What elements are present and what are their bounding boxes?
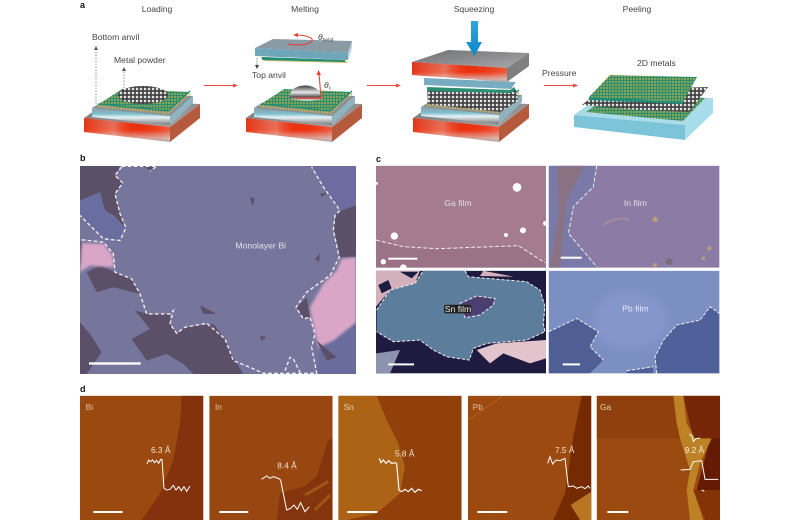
- label: Pressure: Pressure: [542, 68, 577, 78]
- heading: Melting: Melting: [291, 4, 319, 14]
- squeezed metal layer: [427, 88, 518, 112]
- AFM image: Pb: 7.5 Å: [555, 445, 575, 455]
- top anvil plate with twist: θ: [318, 32, 323, 42]
- AFM image: Pb: Pb: [473, 402, 483, 412]
- image: Sn film: [376, 270, 546, 374]
- panel letter c: c: [376, 154, 381, 164]
- bottom anvil block: [246, 100, 362, 142]
- step: squeezing: [412, 4, 529, 142]
- image: Sn film: Sn film: [445, 304, 471, 314]
- label: Top anvil: Top anvil: [252, 70, 286, 80]
- bottom anvil block: [84, 100, 200, 142]
- AFM image: Sn: [338, 396, 462, 520]
- panel b: monolayer Bi micrograph: [80, 153, 356, 374]
- AFM image: In: 8.4 Å: [277, 460, 297, 470]
- image: Pb film: Pb film: [622, 303, 649, 313]
- arrow: pressure: [466, 21, 482, 56]
- heading: Peeling: Peeling: [623, 4, 652, 14]
- AFM image: Bi: 6.3 Å: [151, 445, 171, 455]
- AFM image: Sn: 5.8 Å: [395, 448, 415, 458]
- label: Metal powder: Metal powder: [114, 55, 166, 65]
- panel a: process schematic: [80, 0, 713, 142]
- panel c: metal film micrographs: [375, 154, 719, 373]
- peeled 2D metal sheet: [589, 75, 697, 104]
- label: Bottom anvil: Bottom anvil: [92, 32, 139, 42]
- bottom anvil block: [413, 100, 529, 142]
- step: melting: [246, 4, 362, 142]
- lower metal monolayer: [586, 97, 705, 121]
- step: peeling: [574, 4, 713, 140]
- image: In film: [548, 166, 720, 268]
- label: Monolayer Bi: Monolayer Bi: [235, 240, 286, 250]
- panel letter a: a: [80, 0, 86, 10]
- AFM image: Bi: Bi: [86, 402, 93, 412]
- AFM image: In: [209, 396, 333, 520]
- AFM image: Pb: [468, 396, 592, 520]
- crystal stack on bottom anvil: [92, 89, 193, 125]
- optical image: [80, 166, 356, 374]
- arrow: melting to squeezing: [367, 84, 401, 88]
- molten metal droplet with contact angle: [289, 70, 332, 101]
- molten metal droplet with contact angle: θ: [324, 80, 329, 90]
- step: loading: [84, 4, 200, 142]
- transparent substrate block: [574, 96, 713, 140]
- image: Ga film: Ga film: [444, 198, 472, 208]
- label: 2D metals: 2D metals: [637, 58, 676, 68]
- panel letter d: d: [80, 384, 86, 394]
- AFM image: In: In: [215, 402, 222, 412]
- AFM image: Ga: [596, 396, 720, 520]
- top anvil plate with twist: [255, 32, 352, 63]
- heading: Loading: Loading: [142, 4, 173, 14]
- AFM image: Ga: Ga: [600, 402, 612, 412]
- panel d: AFM height images: [80, 384, 720, 520]
- metal powder pile: [118, 86, 168, 104]
- metal layer: [582, 87, 708, 112]
- AFM image: Bi: [80, 396, 204, 520]
- scale bar: [89, 362, 141, 365]
- AFM image: Sn: Sn: [344, 402, 354, 412]
- heading: Squeezing: Squeezing: [454, 4, 495, 14]
- top anvil plate with twist: twist: [323, 38, 334, 44]
- upper crystal layer: [424, 78, 516, 93]
- crystal stack on bottom anvil: [254, 89, 355, 125]
- image: Ga film: [376, 166, 546, 268]
- arrow: loading to melting: [204, 84, 238, 88]
- top anvil block: [412, 50, 529, 82]
- arrow: pressure to peeling: [542, 68, 578, 88]
- molten metal droplet with contact angle: c: [329, 86, 332, 92]
- image: In film: In film: [624, 198, 647, 208]
- dashed outline of monolayer: [80, 166, 340, 373]
- lower crystal stack: [421, 88, 522, 124]
- image: Pb film: [548, 270, 720, 374]
- panel letter b: b: [80, 153, 86, 163]
- AFM image: Ga: 9.2 Å: [685, 445, 705, 455]
